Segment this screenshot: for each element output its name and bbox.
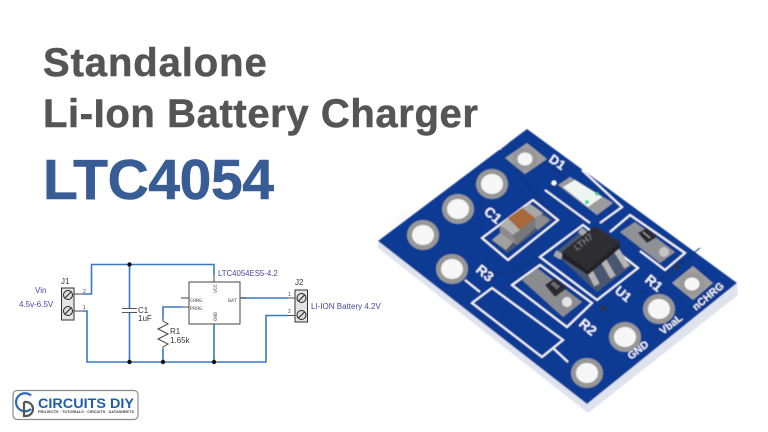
silkscreen labels: U1	[612, 283, 634, 305]
connector J2	[288, 290, 308, 322]
U1 IC chip: LTH7	[572, 232, 595, 253]
logo: Circuits DIY: CIRCUITS DIY	[38, 396, 134, 411]
schematic labels: 4.5v-6.5V	[19, 300, 54, 309]
D1 LED	[552, 177, 613, 215]
logo icon	[16, 393, 33, 416]
schematic labels: J1	[61, 277, 70, 286]
R1 resistor	[620, 222, 675, 263]
IC LTC4054: PROG	[190, 306, 202, 312]
IC LTC4054: CHRG	[190, 298, 202, 304]
resistor R1	[158, 319, 168, 349]
C1 capacitor	[492, 204, 552, 253]
IC LTC4054: VCC	[213, 284, 219, 293]
circuit schematic	[19, 262, 381, 364]
R2 resistor: 202	[550, 281, 560, 291]
schematic labels: 2	[83, 289, 86, 295]
square pads	[505, 143, 547, 174]
schematic labels: LI-ION Battery 4.2V	[311, 302, 381, 311]
C1 box	[482, 200, 558, 260]
R2 box	[512, 265, 592, 327]
silkscreen labels: R2	[576, 315, 600, 339]
IC LTC4054: BAT	[228, 298, 237, 304]
R2 resistor	[522, 268, 582, 317]
schematic labels: 2	[288, 309, 291, 315]
PCB breakout board	[378, 129, 738, 413]
through holes	[410, 150, 702, 386]
silkscreen labels: C1	[481, 203, 505, 227]
capacitor C1	[122, 308, 137, 312]
connector J1	[62, 288, 83, 320]
logo: Circuits DIY	[13, 390, 138, 420]
silkscreen labels: GND	[388, 209, 410, 230]
schematic labels: 1uF	[138, 314, 152, 323]
R1 box	[610, 215, 685, 270]
silkscreen labels: R1	[642, 271, 666, 295]
silkscreen labels: nCHRG	[690, 280, 727, 313]
board edge thickness	[378, 240, 738, 413]
silkscreen labels: R3	[473, 261, 497, 285]
copper traces	[436, 145, 700, 295]
U1 box	[540, 225, 638, 300]
title: Standalone: Standalone	[43, 41, 268, 85]
schematic labels: J2	[295, 278, 304, 287]
schematic labels: 1	[288, 292, 291, 298]
D1 box	[545, 170, 622, 223]
schematic labels	[19, 277, 381, 345]
IC LTC4054: LTC4054ES5-4.2	[218, 269, 278, 278]
IC LTC4054	[181, 269, 278, 324]
IC LTC4054: GND	[213, 312, 219, 321]
silkscreen labels: D1	[546, 151, 569, 173]
vias	[600, 306, 606, 310]
title: Li-Ion Battery Charger: Li-Ion Battery Charger	[43, 92, 478, 136]
junction dots	[127, 262, 216, 364]
silkscreen labels: GND	[625, 338, 652, 362]
R3 outline	[465, 280, 563, 357]
silkscreen labels: VbaL	[657, 312, 686, 337]
silkscreen outlines	[465, 170, 685, 362]
schematic labels: C1	[138, 306, 149, 315]
pads	[410, 143, 713, 386]
blue board surface	[378, 129, 737, 404]
schematic labels: 1	[83, 305, 86, 311]
schematic labels: 1.65k	[170, 336, 191, 345]
silkscreen labels: Vin	[495, 138, 510, 153]
schematic labels: R1	[170, 327, 181, 336]
logo: Circuits DIY: PROJECTS · TUTORIALS · CIRCUITS · DATASHEETS	[38, 410, 134, 414]
schematic labels: Vin	[35, 286, 46, 295]
silkscreen labels	[388, 138, 727, 362]
U1 IC chip	[555, 226, 632, 292]
heading: LTC4054: LTC4054	[43, 148, 274, 212]
